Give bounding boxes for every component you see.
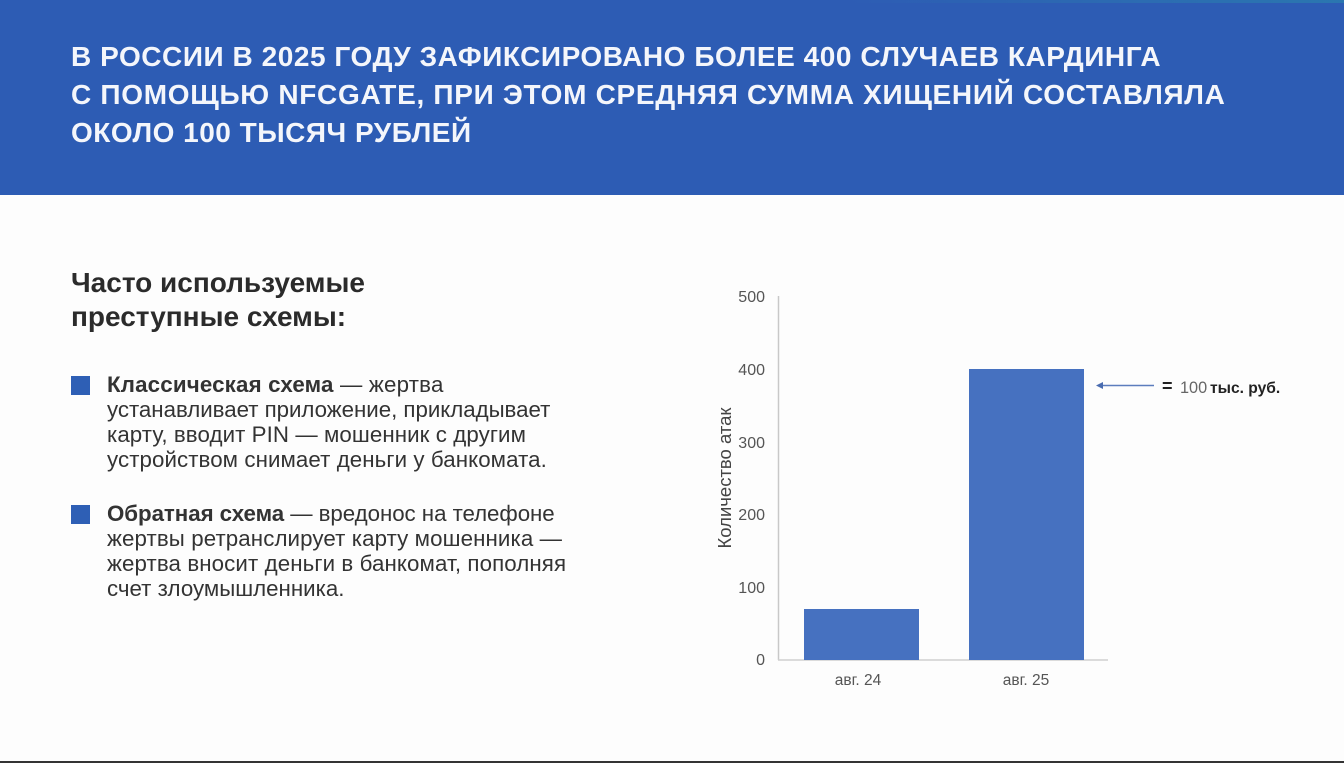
x axis labels xyxy=(835,672,1049,689)
text: reverse scheme: Обратная схема — вредонос на телефоне xyxy=(107,501,555,526)
y axis labels xyxy=(738,289,765,669)
header banner xyxy=(0,0,1344,195)
y axis labels: 300 xyxy=(738,435,765,452)
text: classic scheme: устройством снимает деньги у банкомата. xyxy=(107,447,547,472)
heading: schemes xyxy=(71,267,365,332)
heading: schemes: Часто используемые xyxy=(71,267,365,298)
text: reverse scheme: счет злоумышленника. xyxy=(107,576,344,601)
y axis labels: 200 xyxy=(738,507,765,524)
x axis labels: авг. 24 xyxy=(835,672,882,689)
text: classic scheme: Классическая схема — жертва xyxy=(107,372,444,397)
y axis labels: 100 xyxy=(738,580,765,597)
y axis labels: 500 xyxy=(738,289,765,306)
callout xyxy=(1162,376,1280,397)
headline: ОКОЛО 100 ТЫСЯЧ РУБЛЕЙ xyxy=(71,117,472,148)
bar: Aug 24 xyxy=(804,609,919,660)
callout: тыс. руб. xyxy=(1210,380,1280,397)
headline: С ПОМОЩЬЮ NFCGATE, ПРИ ЭТОМ СРЕДНЯЯ СУММА ХИЩЕНИЙ СОСТАВЛЯЛА xyxy=(71,79,1226,110)
text: classic scheme: устанавливает приложение, прикладывает xyxy=(107,397,550,422)
y axis labels: 0 xyxy=(756,652,765,669)
bullet icon: reverse scheme xyxy=(71,505,90,524)
headline xyxy=(71,41,1226,148)
y axis title: Количество атак xyxy=(714,407,735,549)
y axis labels: 400 xyxy=(738,362,765,379)
text: reverse scheme: жертвы ретранслирует карту мошенника — xyxy=(107,526,562,551)
x axis labels: авг. 25 xyxy=(1003,672,1049,689)
callout: 100 xyxy=(1180,379,1207,397)
bullet icon: classic scheme xyxy=(71,376,90,395)
headline: В РОССИИ В 2025 ГОДУ ЗАФИКСИРОВАНО БОЛЕЕ 400 СЛУЧАЕВ КАРДИНГА xyxy=(71,41,1161,72)
text: reverse scheme xyxy=(107,501,566,601)
heading: schemes: преступные схемы: xyxy=(71,301,346,332)
bottom edge line xyxy=(0,761,1344,763)
text: classic scheme: карту, вводит PIN — мошенник с другим xyxy=(107,422,526,447)
text: classic scheme xyxy=(107,372,550,472)
text: reverse scheme: жертва вносит деньги в банкомат, пополняя xyxy=(107,551,566,576)
callout: = xyxy=(1162,376,1173,396)
bar: Aug 25 xyxy=(969,369,1084,660)
arrow xyxy=(1096,382,1154,389)
